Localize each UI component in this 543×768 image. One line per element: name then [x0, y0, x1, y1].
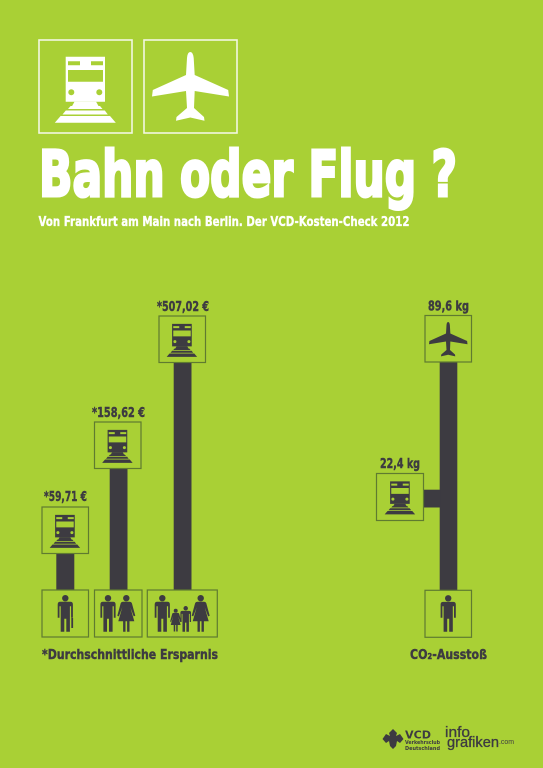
wordmark: grafiken: grafiken [447, 734, 499, 751]
wordmark: .com: .com [499, 739, 514, 746]
icon: single traveller [42, 590, 88, 637]
chart: CO2 emissions [376, 298, 487, 663]
logo: VCD [382, 728, 440, 752]
value: 89,6 kg: 89,6 kg [428, 298, 469, 314]
logo: infografiken [445, 724, 514, 751]
bar: 507,02 euro [174, 363, 192, 590]
axis label: savings: *Durchschnittliche Ersparnis [42, 647, 218, 663]
icon: train small 2 [94, 422, 141, 468]
axis label: CO2: CO₂-Ausstoß [410, 647, 487, 663]
icon: VCD emblem [382, 729, 404, 749]
subtitle: Von Frankfurt am Main nach Berlin. Der VCD-Kosten-Check 2012 [38, 214, 410, 230]
icon: train small 3 [159, 316, 206, 362]
bar: 158,62 euro [110, 469, 128, 590]
icon: couple [94, 590, 142, 637]
VCD full name: Verkehrsclub [405, 740, 440, 746]
value: 59,71 euro: *59,71 € [44, 489, 87, 505]
icon: plane header box [144, 40, 237, 133]
icon: train small [376, 474, 424, 520]
value: 22,4 kg: 22,4 kg [380, 456, 420, 472]
icon: train small 1 [42, 507, 88, 554]
value: 158,62 euro: *158,62 € [92, 405, 145, 421]
chart: savings bars [42, 299, 218, 663]
icon: family [147, 590, 217, 637]
VCD wordmark: VCD [405, 728, 431, 742]
bar: plane emissions [440, 362, 457, 590]
icon: plane small [425, 316, 472, 362]
wordmark: info: info [445, 724, 470, 741]
bar: train emissions connector [424, 490, 440, 508]
bar: 59,71 euro [56, 553, 74, 590]
value: 507,02 euro: *507,02 € [157, 299, 209, 315]
icon: traveller [425, 590, 472, 637]
icon: train header box [39, 40, 132, 133]
VCD country: Deutschland [405, 746, 440, 752]
